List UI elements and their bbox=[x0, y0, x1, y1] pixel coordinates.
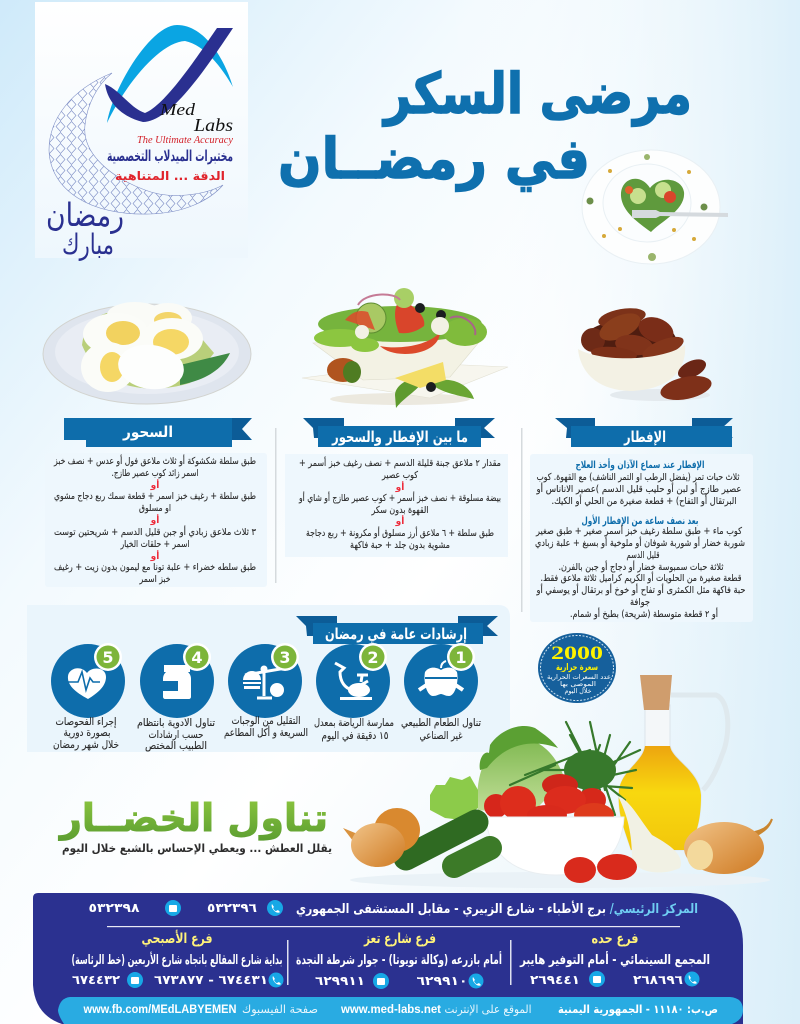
badge 2: 2 bbox=[367, 648, 379, 667]
badge 4: 4 bbox=[191, 648, 203, 667]
main center address: ٥٣٢٣٩٨ bbox=[88, 900, 140, 915]
banner: suhoor: السحور bbox=[122, 423, 173, 441]
caption 3 bbox=[224, 715, 308, 739]
heading: eat vegetables: تناول الخضــار bbox=[58, 796, 328, 841]
caption 3: التقليل من الوجبات bbox=[232, 715, 300, 727]
caption 4: حسب ارشادات bbox=[148, 729, 204, 741]
title: مرضى السكر bbox=[381, 62, 692, 127]
text: between meals bbox=[298, 456, 501, 551]
text: suhoor meals: طبق سلطة شكشوكة أو ثلاث ملاعق فول أو عدس + نصف خبز bbox=[53, 454, 256, 467]
text: between meals: أو bbox=[395, 481, 404, 493]
cucumbers bbox=[406, 822, 490, 866]
footer bar: الموقع على الإنترنت bbox=[444, 1002, 532, 1017]
text: suhoor meals: اسمر + حلقات الخيار bbox=[120, 539, 190, 550]
badge 1: 1 bbox=[455, 648, 467, 667]
text: iftar meals: كوب ماء + طبق سلطة رغيف خبز أسمر صغير + طبق صغير bbox=[535, 524, 742, 537]
badge: 2000 calories: الموصى بها bbox=[560, 680, 596, 688]
logo tagline: The Ultimate Accuracy bbox=[137, 135, 234, 146]
caption 2: ١٥ دقيقة في اليوم bbox=[322, 730, 388, 742]
icon: light ribbon bbox=[107, 25, 233, 123]
text: suhoor meals: طبق سلطه خضراء + علبة تونا مع ليمون بدون زيت + رغيف bbox=[54, 562, 256, 573]
badge: 2000 calories: عدد السعرات الحرارية bbox=[547, 673, 611, 681]
text: iftar meals: شوربة خضار أو شوربة شوفان أو ملوخية أو بسبغ + علبة زبادي bbox=[535, 536, 745, 549]
text: iftar meals: جوافة bbox=[630, 597, 650, 608]
illustration: vegetables and oil bbox=[343, 675, 772, 888]
text: between meals: بيضة مسلوقة + نصف خبز أسمر + كوب عصير طازج أو شاي أو bbox=[298, 491, 501, 504]
panel: iftar bbox=[530, 418, 753, 622]
bowl bbox=[486, 817, 624, 875]
title: في رمضــان bbox=[278, 127, 590, 192]
tomatoes front bbox=[564, 854, 637, 883]
ramadan greeting line 1: رمضان bbox=[46, 196, 124, 234]
logo wordmark Labs: Labs bbox=[193, 115, 233, 135]
caption 5: إجراء الفحوصات bbox=[56, 716, 117, 728]
branch: asbahi bbox=[72, 930, 284, 988]
branch: taiz street: فرع شارع تعز bbox=[363, 931, 436, 947]
divider: branch 2 bbox=[287, 940, 288, 985]
onion left bbox=[343, 808, 420, 867]
banner: iftar: الإفطار bbox=[623, 428, 666, 446]
footer bar: ص.ب: ١١١٨٠ - الجمهورية اليمنية bbox=[558, 1002, 718, 1017]
banner: guidance: إرشادات عامة في رمضان bbox=[325, 625, 467, 643]
text: iftar meals: ثلاثة حبات سمبوسة خضار أو دجاج أو جبن بالفرن. bbox=[558, 560, 724, 573]
branch: hadda: المجمع السينمائي - أمام التوفير هايبر bbox=[519, 951, 710, 968]
branch: taiz street: أمام بازرعه (وكالة تويوتا) - جوار شرطة النجدة bbox=[296, 951, 502, 968]
text: between meals: طبق سلطة + ٦ ملاعق أرز مسلوق أو مكرونة + ربع دجاجة bbox=[306, 526, 494, 539]
item 1: natural food bbox=[401, 643, 481, 742]
ramadan greeting line 2: مبارك bbox=[62, 228, 114, 261]
caption 1 bbox=[401, 717, 481, 742]
illustration: dates bowl bbox=[578, 305, 714, 404]
main center address: المركز الرئيسي/ برج الأطباء - شارع الزبيري - مقابل المستشفى الجمهوري bbox=[296, 900, 698, 917]
panel: suhoor bbox=[45, 418, 267, 587]
branch: hadda bbox=[519, 931, 710, 987]
caption 5: خلال شهر رمضان bbox=[53, 739, 119, 751]
logo arabic name: مختبرات الميدلاب التخصصية bbox=[107, 147, 233, 165]
text: between meals: مقدار ٢ ملاعق جبنة قليلة الدسم + نصف رغيف خبز أسمر + bbox=[299, 456, 501, 469]
badge: 2000 calories bbox=[538, 633, 616, 703]
branch: taiz street bbox=[296, 931, 502, 989]
onion right bbox=[684, 819, 772, 874]
text: between meals: مشوية بدون جلد + حبة فاكهة bbox=[350, 540, 450, 551]
badge 5: 5 bbox=[102, 648, 114, 667]
text: suhoor meals: أو bbox=[150, 514, 159, 526]
banner: between: ما بين الإفطار والسحور bbox=[331, 428, 468, 446]
branch: asbahi: فرع الأصبحي bbox=[142, 930, 212, 947]
caption 1: تناول الطعام الطبيعي bbox=[401, 717, 481, 729]
title bbox=[278, 62, 692, 192]
caption 5: بصورة دورية bbox=[64, 727, 110, 739]
text: iftar meals: قطعة صغيرة من الحلويات أو الكريم كراميل ثلاثة ملاعق فقط. bbox=[540, 571, 742, 584]
panel: footer contacts bbox=[33, 893, 743, 1024]
branch: asbahi: ٦٧٣٨٧٧ - ٦٧٤٤٣١ bbox=[154, 972, 268, 987]
text: iftar meals: البرتقال أو التفاح) + قطعة صغيرة من الحلي أو الكيك. bbox=[552, 494, 736, 507]
main center address bbox=[88, 900, 698, 917]
garlic bbox=[618, 796, 681, 873]
text: iftar meals: الإفطار عند سماع الآذان وأخذ العلاج bbox=[576, 458, 704, 471]
caption 3: السريعة و أكل المطاعم bbox=[224, 725, 308, 739]
caption 4: تناول الادوية بانتظام bbox=[137, 717, 215, 729]
text: suhoor meals: أو bbox=[150, 479, 159, 491]
branch: hadda: ٢٦٩٤٤١ bbox=[530, 972, 580, 987]
caption 4 bbox=[137, 717, 215, 752]
text: suhoor meals bbox=[53, 454, 256, 585]
badge: 2000 calories: 2000 bbox=[551, 643, 603, 664]
text: iftar meals: ثلاث حبات تمر (يفضل الرطب او التمر الناشف) مع القهوة. كوب bbox=[536, 472, 740, 483]
banner: iftar bbox=[555, 418, 733, 447]
panel: between iftar and suhoor bbox=[285, 418, 508, 557]
tomatoes in bowl bbox=[484, 774, 614, 827]
divider line bbox=[107, 926, 680, 927]
text: suhoor meals: ٣ ثلاث ملاعق زبادي أو جبن قليل الدسم + شريحتين توست bbox=[54, 525, 256, 538]
footer bar: صفحة الفيسبوك bbox=[242, 1002, 318, 1017]
branch: hadda: ٢٦٨٦٩٦ bbox=[633, 972, 683, 987]
footer bar bbox=[58, 997, 743, 1024]
caption 2: ممارسة الرياضة بمعدل bbox=[314, 717, 394, 729]
illustration: eggs plate bbox=[43, 302, 251, 404]
text: suhoor meals: اسمر زائد كوب عصير طازج. bbox=[112, 468, 198, 479]
text: iftar meals: قليل الدسم bbox=[626, 550, 660, 561]
curly lettuce bbox=[430, 776, 478, 820]
logo wordmark Med: Med bbox=[159, 100, 196, 119]
panel: general guidance bbox=[27, 605, 510, 752]
text: iftar meals: حبة فاكهة مثل الكمثرى أو تفاح أو خوخ أو برتقال أو يوسفي أو bbox=[536, 583, 746, 596]
badge: 2000 calories: خلال اليوم bbox=[564, 687, 592, 695]
text: suhoor meals: او مسلوق bbox=[139, 503, 171, 514]
text: suhoor meals: خبز اسمر bbox=[139, 574, 171, 585]
divider: left bbox=[275, 428, 276, 583]
divider: right bbox=[521, 428, 522, 612]
branch: asbahi: ٦٧٤٤٣٢ bbox=[72, 972, 120, 987]
caption 1: غير الصناعي bbox=[420, 730, 463, 742]
main center address: ٥٣٢٣٩٦ bbox=[207, 900, 257, 915]
text: suhoor meals: أو bbox=[150, 550, 159, 562]
divider: branch 1 bbox=[510, 940, 512, 985]
logo panel bbox=[35, 2, 248, 261]
text: iftar meals: عصير طازج أو لبن أو حليب قليل الدسم )عصير الاناناس أو bbox=[536, 482, 742, 495]
item 5: checkups bbox=[51, 643, 125, 751]
lettuce bbox=[477, 738, 565, 815]
banner: between bbox=[303, 418, 495, 447]
oil jug bbox=[619, 675, 728, 850]
text: between meals: كوب عصير bbox=[381, 470, 418, 481]
badge 3: 3 bbox=[279, 648, 291, 667]
footer bar: www.med-labs.net bbox=[340, 1004, 441, 1016]
icon: crescent moon bbox=[49, 73, 223, 214]
caption 5 bbox=[53, 716, 119, 751]
branch: asbahi: بداية شارع المقالع باتجاه شارع الأربعين (خط الرئاسة) bbox=[72, 951, 282, 968]
banner: guidance bbox=[296, 616, 498, 644]
text: suhoor meals: طبق سلطة + رغيف خبز اسمر + قطعة سمك ربع دجاج مشوي bbox=[54, 491, 256, 502]
caption 2 bbox=[314, 717, 394, 742]
text: iftar meals bbox=[535, 458, 746, 620]
footer bar: www.fb.com/MEdLABYEMEN bbox=[83, 1004, 236, 1016]
badge: 2000 calories: سعرة حرارية bbox=[556, 663, 598, 673]
dill bbox=[510, 722, 640, 815]
illustration: heart salad plate bbox=[582, 150, 728, 264]
branch: taiz street: ٦٢٩٩١١ bbox=[315, 973, 365, 988]
branch: taiz street: ٦٢٩٩١٠ bbox=[416, 973, 468, 988]
caption 4: الطبيب المختص bbox=[145, 740, 207, 752]
logo arabic slogan: الدقة ... المتناهية bbox=[115, 169, 225, 183]
text: iftar meals: بعد نصف ساعة من الإفطار الأول bbox=[582, 514, 698, 527]
text: between meals: أو bbox=[395, 515, 404, 527]
banner: suhoor bbox=[64, 418, 252, 447]
text: between meals: القهوة بدون سكر bbox=[371, 505, 428, 516]
icon: dark ribbon bbox=[105, 28, 233, 122]
item 2: exercise bbox=[314, 643, 394, 742]
item 3: less fast food bbox=[224, 643, 308, 739]
item 4: medication bbox=[137, 643, 215, 752]
illustration: salad bowl bbox=[302, 288, 508, 408]
text: vegetables benefit: يقلل العطش ... ويعطي الإحساس بالشبع خلال اليوم bbox=[62, 841, 332, 856]
text: iftar meals: أو ٢ قطعة متوسطة (شريحة) بطبخ أو شمام. bbox=[570, 607, 718, 620]
branch: hadda: فرع حده bbox=[592, 931, 638, 947]
